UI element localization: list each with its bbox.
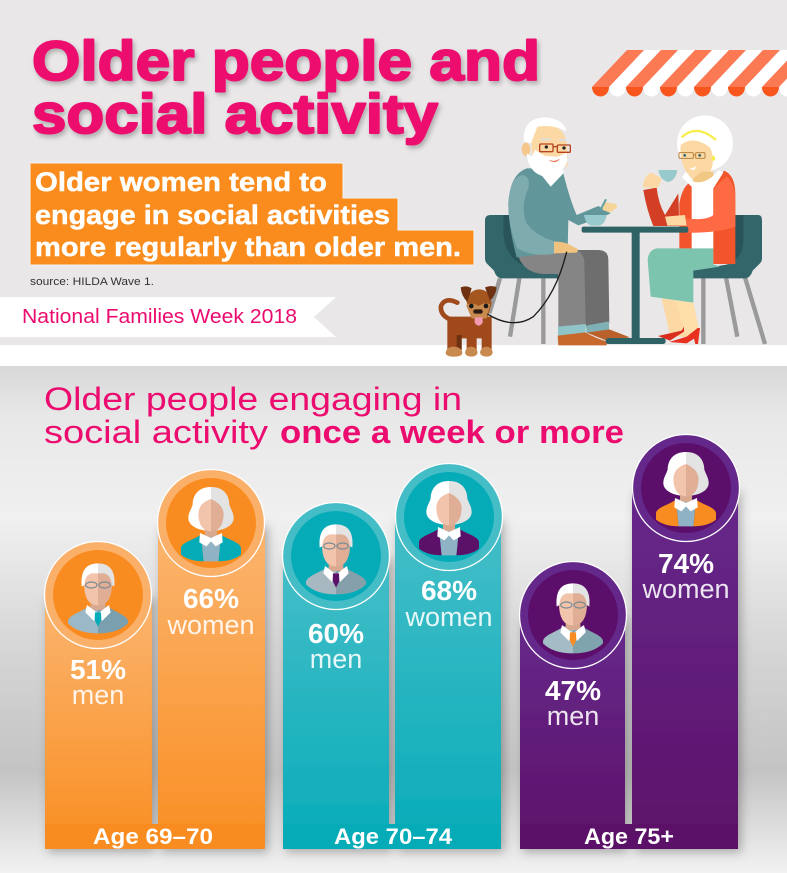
value: 47% men: men xyxy=(547,701,599,731)
title: Older people and xyxy=(32,29,540,92)
bar group: Age 75+ xyxy=(520,434,740,849)
value: 66% women xyxy=(166,583,255,640)
value: 60% men: men xyxy=(310,644,362,674)
callout: key finding xyxy=(30,163,474,265)
banner: National Families Week xyxy=(0,297,336,337)
bar group: Age 69-70 xyxy=(44,470,265,849)
bar: men 51% xyxy=(45,595,152,849)
bar: women 68% xyxy=(395,517,501,849)
left chair xyxy=(485,215,558,344)
age label bar xyxy=(520,824,738,849)
leash xyxy=(487,252,567,323)
value: 47% men xyxy=(545,675,601,731)
table xyxy=(582,227,688,344)
avatar: woman, teal xyxy=(396,464,502,570)
bar: women 66% xyxy=(158,523,265,849)
value: 60% men xyxy=(308,618,364,674)
value: 68% women: women xyxy=(404,602,493,632)
callout: key finding: more regularly than older men. xyxy=(35,232,461,262)
bar: women 74% xyxy=(632,488,738,849)
man xyxy=(508,117,630,345)
right chair xyxy=(692,215,765,344)
value: 60% men: 60% xyxy=(308,618,364,649)
banner: National Families Week: National Families Week 2018 xyxy=(22,306,297,328)
woman xyxy=(643,115,735,344)
chart heading: social activity xyxy=(44,414,268,450)
title xyxy=(32,29,540,145)
callout: key finding: Older women tend to xyxy=(35,167,327,197)
age label bar xyxy=(283,824,501,849)
value: 51% men: men xyxy=(72,680,124,710)
label: Age 69-70: Age 69–70 xyxy=(93,824,213,849)
value: 51% men: 51% xyxy=(70,654,126,685)
bottom background panel xyxy=(0,366,787,873)
value: 74% women: 74% xyxy=(658,548,714,579)
value: 51% men xyxy=(70,654,126,710)
value: 68% women: 68% xyxy=(421,575,477,606)
illustration: couple at cafe table with dog xyxy=(441,115,765,357)
label: Age 75+: Age 75+ xyxy=(584,824,674,849)
woman's hand on table xyxy=(665,215,687,226)
bar: men 60% xyxy=(283,556,389,849)
white divider band xyxy=(0,345,787,366)
value: 66% women: 66% xyxy=(183,583,239,614)
top background panel xyxy=(0,0,787,345)
callout: key finding: engage in social activities xyxy=(35,200,390,230)
avatar: man, orange xyxy=(44,542,152,648)
awning xyxy=(592,50,787,96)
avatar: woman, orange xyxy=(158,470,264,576)
avatar: man, teal xyxy=(282,502,390,610)
value: 47% men: 47% xyxy=(545,675,601,706)
bar group: Age 70-74 xyxy=(282,464,502,849)
chart heading xyxy=(44,381,624,450)
chart heading: Older people engaging in xyxy=(44,381,462,417)
avatar: man, purple xyxy=(520,562,626,668)
value: 74% women xyxy=(641,548,730,604)
label: Age 70-74: Age 70–74 xyxy=(334,824,453,849)
title: social activity xyxy=(32,82,438,145)
age label bar xyxy=(45,824,265,849)
value: 66% women: women xyxy=(166,610,255,640)
value: 68% women xyxy=(404,575,493,632)
avatar: woman, purple xyxy=(632,434,740,542)
dog xyxy=(441,286,497,357)
value: 74% women: women xyxy=(641,574,730,604)
bar: men 47% xyxy=(520,615,625,849)
chart heading: once a week or more xyxy=(280,414,624,450)
source note: source: HILDA Wave 1. xyxy=(30,276,154,288)
